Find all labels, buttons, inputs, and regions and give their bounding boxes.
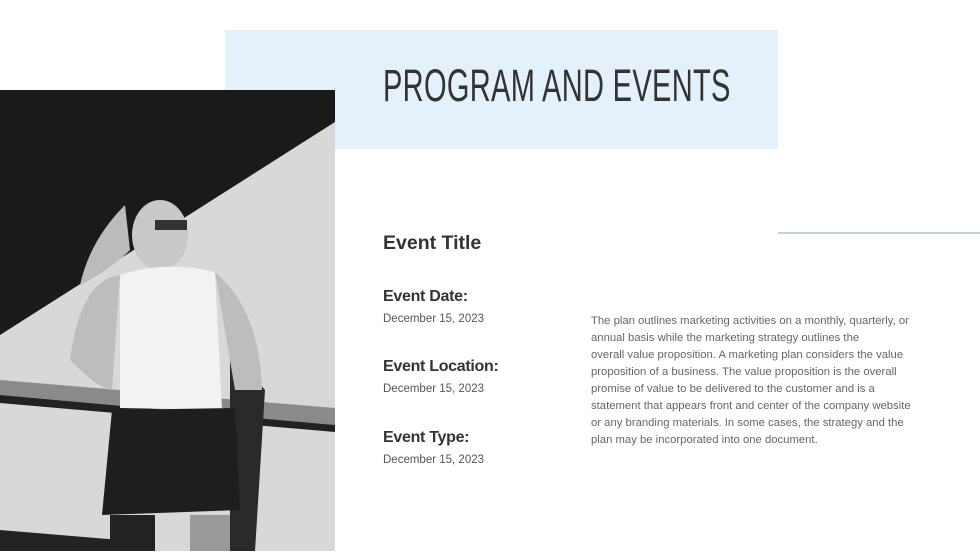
divider line <box>778 232 980 234</box>
event details: December 15, 2023 <box>383 313 484 325</box>
title box <box>225 30 778 149</box>
event date: Event Date: <box>383 288 468 305</box>
event title: Event Title <box>383 232 481 254</box>
event details: December 15, 2023 <box>383 383 484 395</box>
description paragraph: The plan outlines marketing activities on a monthly, quarterly, or annual basis while the marketing strategy outlines the <box>591 315 909 344</box>
event location: Event Location: <box>383 358 499 375</box>
title: PROGRAM AND EVENTS <box>383 60 731 111</box>
event type: Event Type: <box>383 429 469 446</box>
event details: December 15, 2023 <box>383 454 484 466</box>
event details <box>383 288 499 466</box>
photo: woman in black and white <box>0 90 335 551</box>
description paragraph: overall value proposition. A marketing plan considers the value proposition of a business. The value proposition is the overall promise of value to be delivered to the customer and is a statement that appears front and center of the company website or any branding materials. In some cases, the strategy and the plan may be incorporated into one document. <box>591 349 911 446</box>
